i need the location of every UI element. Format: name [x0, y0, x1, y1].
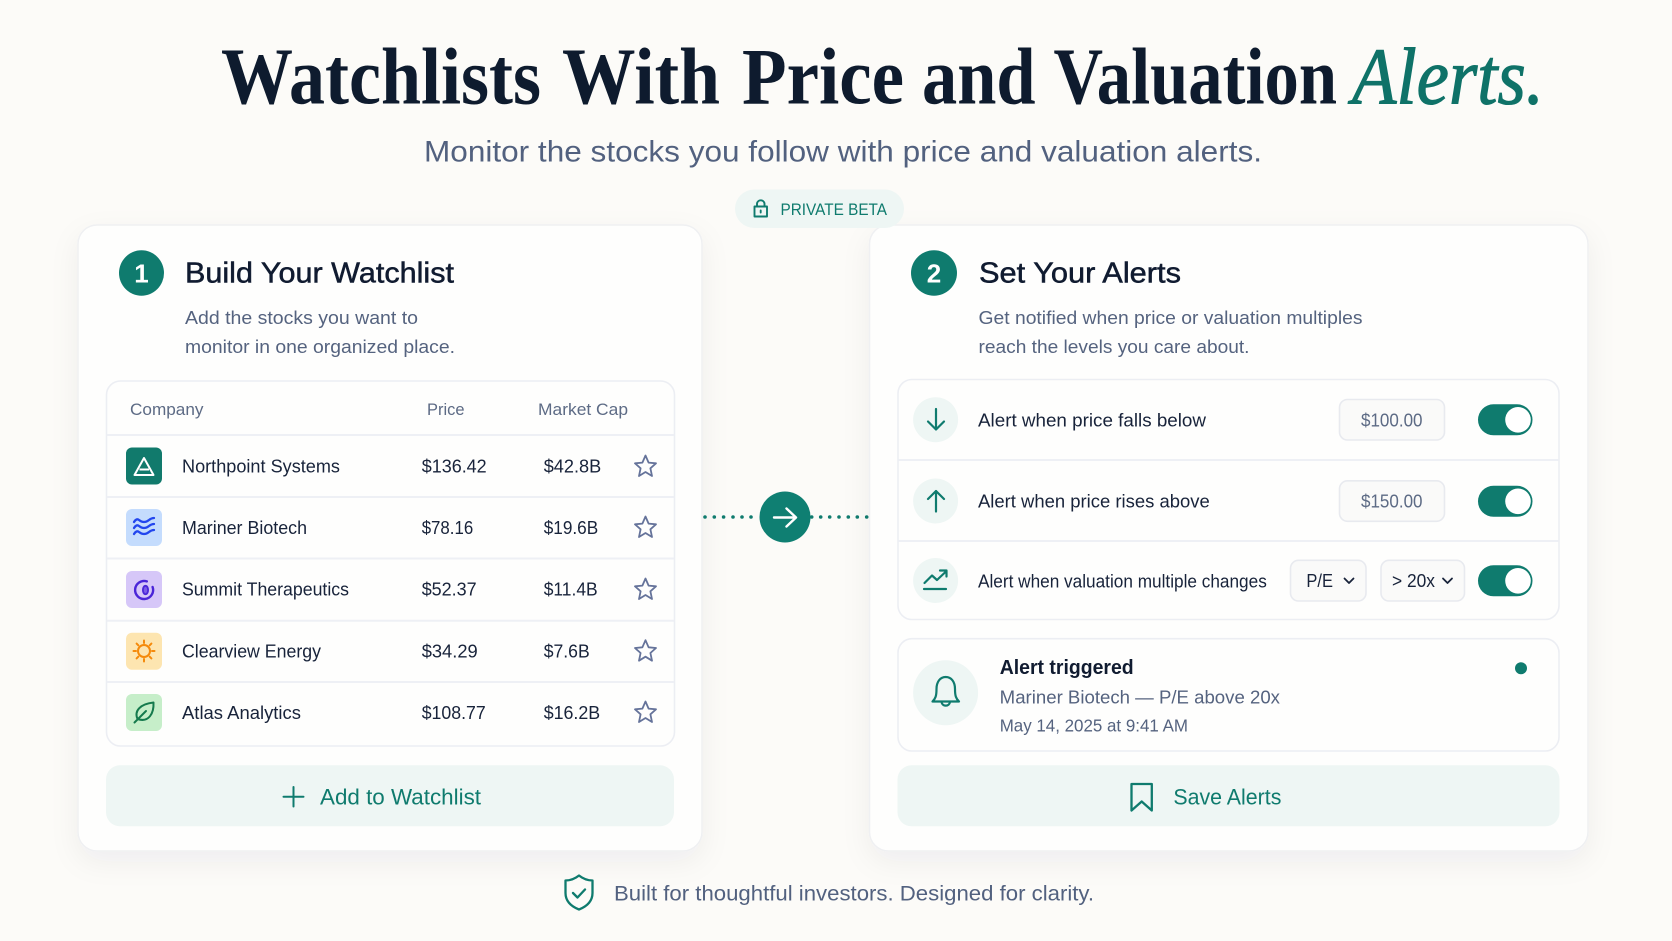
title: Watchlists	[221, 32, 541, 122]
alert triggered card: Alert triggered	[1000, 656, 1134, 679]
row: Mariner Biotech: $19.6B	[544, 517, 598, 538]
rule: price falls below	[913, 397, 1532, 442]
step number 2: 2	[927, 258, 941, 288]
row: Clearview Energy: $34.29	[422, 640, 478, 661]
step number 1	[119, 250, 164, 296]
title accent word: Alerts.	[1348, 32, 1544, 122]
button: add to watchlist	[106, 765, 674, 826]
rule: price rises above: Alert when price rises above	[978, 491, 1210, 512]
row: Northpoint Systems: $136.42	[422, 456, 487, 477]
panel: build your watchlist	[78, 225, 702, 851]
watchlist table	[106, 381, 674, 746]
row: Atlas Analytics: $108.77	[422, 702, 486, 723]
row: Northpoint Systems: Northpoint Systems	[182, 456, 340, 477]
row: Atlas Analytics: Atlas Analytics	[182, 702, 301, 723]
button: save alerts	[898, 765, 1560, 826]
row: Mariner Biotech: Mariner Biotech	[182, 517, 307, 538]
row: Summit Therapeutics: Summit Therapeutics	[182, 579, 349, 600]
table header: Price	[427, 401, 464, 419]
private beta badge: PRIVATE BETA	[780, 201, 887, 219]
description: reach the levels you care about.	[978, 336, 1250, 357]
row: Northpoint Systems: $42.8B	[544, 456, 601, 477]
description	[185, 307, 455, 357]
row: Summit Therapeutics	[126, 571, 656, 608]
footer tagline: Built for thoughtful investors. Designed for clarity.	[614, 883, 1094, 906]
row: Atlas Analytics	[126, 694, 656, 731]
button: save alerts: Save Alerts	[1173, 784, 1281, 809]
icon: bell	[913, 660, 978, 725]
alert triggered card	[898, 639, 1559, 751]
rule: valuation multiple changes: Alert when valuation multiple changes	[978, 570, 1267, 591]
table header: Company	[130, 401, 204, 419]
row: Atlas Analytics: $16.2B	[544, 702, 600, 723]
title: Price	[742, 32, 904, 122]
icon: lock	[754, 200, 767, 216]
step number 2	[911, 250, 957, 296]
row: Northpoint Systems	[126, 448, 656, 484]
subtitle: Monitor the stocks you follow with price and valuation alerts.	[424, 136, 1262, 169]
title: With	[562, 32, 720, 122]
alert rules list	[898, 380, 1559, 620]
button: add to watchlist: Add to Watchlist	[320, 784, 481, 809]
row: Clearview Energy: Clearview Energy	[182, 640, 322, 661]
step number 1: 1	[134, 258, 149, 288]
icon: shield	[566, 876, 592, 910]
description: monitor in one organized place.	[185, 336, 455, 357]
row: Mariner Biotech: $78.16	[422, 517, 473, 538]
row: Mariner Biotech	[126, 509, 656, 546]
arrow connector between steps	[703, 492, 868, 542]
select: P/E	[1290, 560, 1366, 601]
row: Clearview Energy	[126, 633, 656, 670]
heading: Build Your Watchlist	[185, 258, 454, 290]
rule: price rises above	[913, 478, 1532, 524]
rule: price falls below: $100.00	[1361, 411, 1422, 431]
table header	[130, 401, 628, 419]
title: Valuation	[1054, 32, 1337, 122]
row: Summit Therapeutics: $11.4B	[544, 579, 598, 600]
row: Summit Therapeutics: $52.37	[422, 579, 477, 600]
status dot	[1515, 662, 1527, 674]
title: and	[922, 32, 1036, 122]
description: Add the stocks you want to	[185, 307, 418, 328]
rule: price rises above: $150.00	[1361, 492, 1422, 512]
private beta badge	[735, 190, 904, 228]
alert triggered card: May 14, 2025 at 9:41 AM	[1000, 716, 1188, 736]
panel: set your alerts	[870, 225, 1588, 851]
description	[978, 307, 1362, 357]
footer tagline	[566, 876, 1094, 910]
select: P/E: P/E	[1306, 571, 1333, 591]
select: greater than 20x	[1381, 560, 1464, 601]
rule: valuation multiple changes	[913, 558, 1532, 603]
table header: Market Cap	[538, 401, 628, 419]
alert triggered card: Mariner Biotech — P/E above 20x	[1000, 686, 1281, 707]
title	[221, 32, 1544, 122]
row: Clearview Energy: $7.6B	[544, 640, 590, 661]
rule: price falls below: Alert when price falls below	[978, 410, 1207, 431]
description: Get notified when price or valuation multiples	[978, 307, 1362, 328]
select: greater than 20x: > 20x	[1392, 571, 1435, 591]
heading: Set Your Alerts	[979, 258, 1181, 290]
